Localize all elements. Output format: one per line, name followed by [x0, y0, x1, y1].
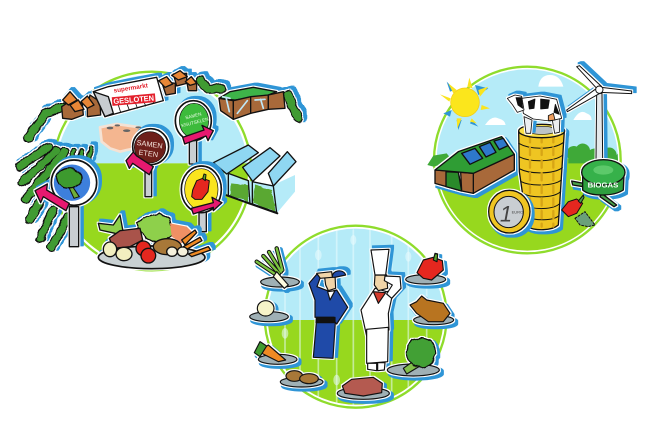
houses right — [159, 71, 197, 95]
samen knutselen text: SAMEN — [185, 111, 202, 120]
mushrooms — [167, 247, 177, 256]
outer hedge — [427, 153, 453, 167]
cow — [507, 95, 562, 133]
plate: potatoes — [280, 371, 323, 387]
coin unit: EURO — [512, 210, 523, 215]
infographic canvas — [14, 61, 637, 409]
coin value: 1 — [500, 202, 512, 227]
scene circle — [265, 226, 448, 410]
craft workshop with tools — [219, 87, 285, 119]
samen eten text: SAMEN — [136, 138, 163, 150]
sign: broccoli — [35, 160, 97, 247]
sign: samen knutselen — [175, 101, 213, 164]
greenhouse — [213, 145, 296, 213]
wind turbine — [567, 66, 632, 160]
arrow: broccoli — [35, 184, 69, 211]
coin stack — [519, 124, 565, 230]
carrots — [182, 230, 197, 245]
plate: pepper — [406, 253, 446, 284]
plate: leek — [257, 248, 299, 288]
gesloten banner: GESLOTEN — [113, 94, 155, 106]
lettuce — [136, 213, 173, 245]
chef — [361, 249, 401, 371]
eggs and onions — [103, 242, 117, 257]
arrow: samen knutselen — [183, 125, 213, 144]
plate of food — [98, 213, 211, 269]
sign: cheese and samen eten — [100, 124, 169, 197]
steak — [109, 228, 143, 248]
broccoli icon — [57, 168, 82, 198]
plate: steak — [337, 377, 389, 399]
panel: village, signs and shared meal — [19, 70, 298, 273]
hedges — [28, 81, 298, 137]
greenhouse plants — [230, 183, 275, 211]
sign: pepper — [181, 166, 222, 232]
arrow: samen eten — [126, 152, 153, 175]
scene circle — [50, 70, 257, 273]
biogas text: BIOGAS — [588, 183, 619, 190]
sign post and disc — [126, 129, 169, 197]
panel: sustainable energy and income — [427, 65, 632, 265]
plate: onion — [250, 301, 288, 322]
village strip — [28, 71, 298, 137]
tomatoes — [136, 241, 151, 256]
potato — [153, 239, 181, 255]
arrow: pepper — [191, 197, 222, 214]
samen knutselen text: KNUTSELEN — [181, 117, 209, 128]
greenhouse glass — [224, 172, 295, 213]
pepper and plant waste — [562, 195, 595, 227]
sun — [440, 78, 490, 130]
barn with solar panels — [435, 137, 514, 193]
cheese — [100, 124, 143, 152]
euro coin — [489, 190, 530, 233]
scene circle — [433, 66, 622, 254]
supermarket closed — [93, 77, 163, 117]
leek — [98, 215, 124, 237]
houses left — [62, 92, 101, 119]
samen eten text: ETEN — [138, 148, 159, 159]
farmer — [309, 271, 348, 358]
pepper icon — [192, 174, 209, 199]
greenhouse frame — [213, 145, 296, 213]
field rows — [19, 147, 91, 247]
plate: chicken — [410, 296, 454, 325]
plate: broccoli — [387, 338, 439, 376]
panel: farmer, chef and products — [250, 226, 454, 410]
supermarkt label: supermarkt — [113, 82, 149, 95]
biogas tank — [572, 160, 625, 207]
plate: carrots — [254, 342, 297, 364]
salmon pieces — [170, 223, 192, 243]
